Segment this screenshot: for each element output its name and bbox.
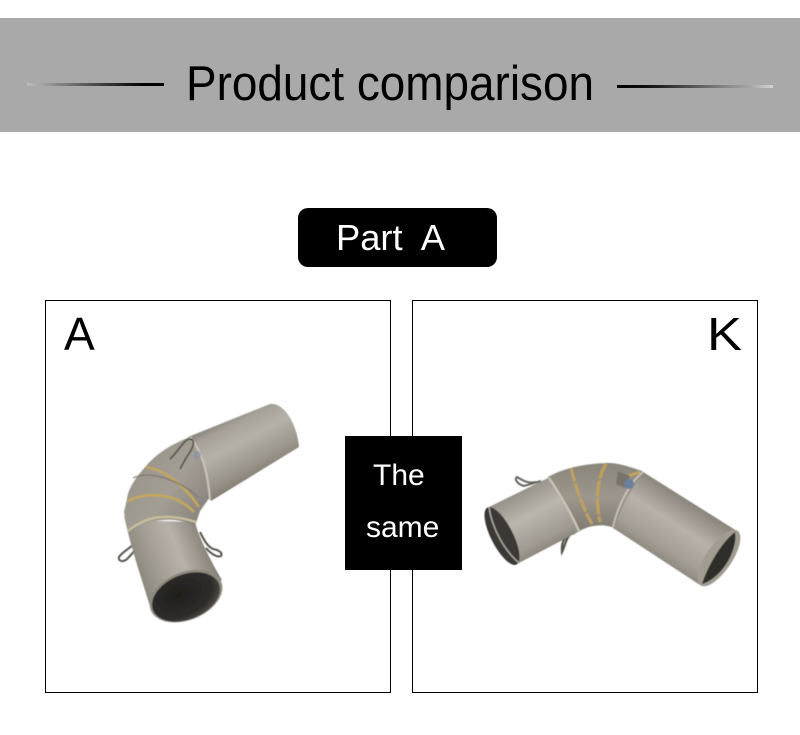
panel: A <box>46 300 390 692</box>
image: bent pipe A <box>119 404 299 632</box>
badge: Part A <box>298 208 497 267</box>
callout: The same <box>345 436 462 570</box>
panel: K <box>412 300 758 692</box>
label K: K <box>707 308 742 360</box>
badge: Part A: Part A <box>336 217 445 258</box>
header band <box>0 18 800 132</box>
right rule <box>617 85 773 88</box>
image: bent pipe K <box>478 463 748 593</box>
heading: Product comparison <box>186 57 594 111</box>
label A: A <box>64 308 95 360</box>
left rule <box>27 83 164 86</box>
callout: The same: The <box>373 459 425 492</box>
callout: The same: same <box>366 511 439 544</box>
